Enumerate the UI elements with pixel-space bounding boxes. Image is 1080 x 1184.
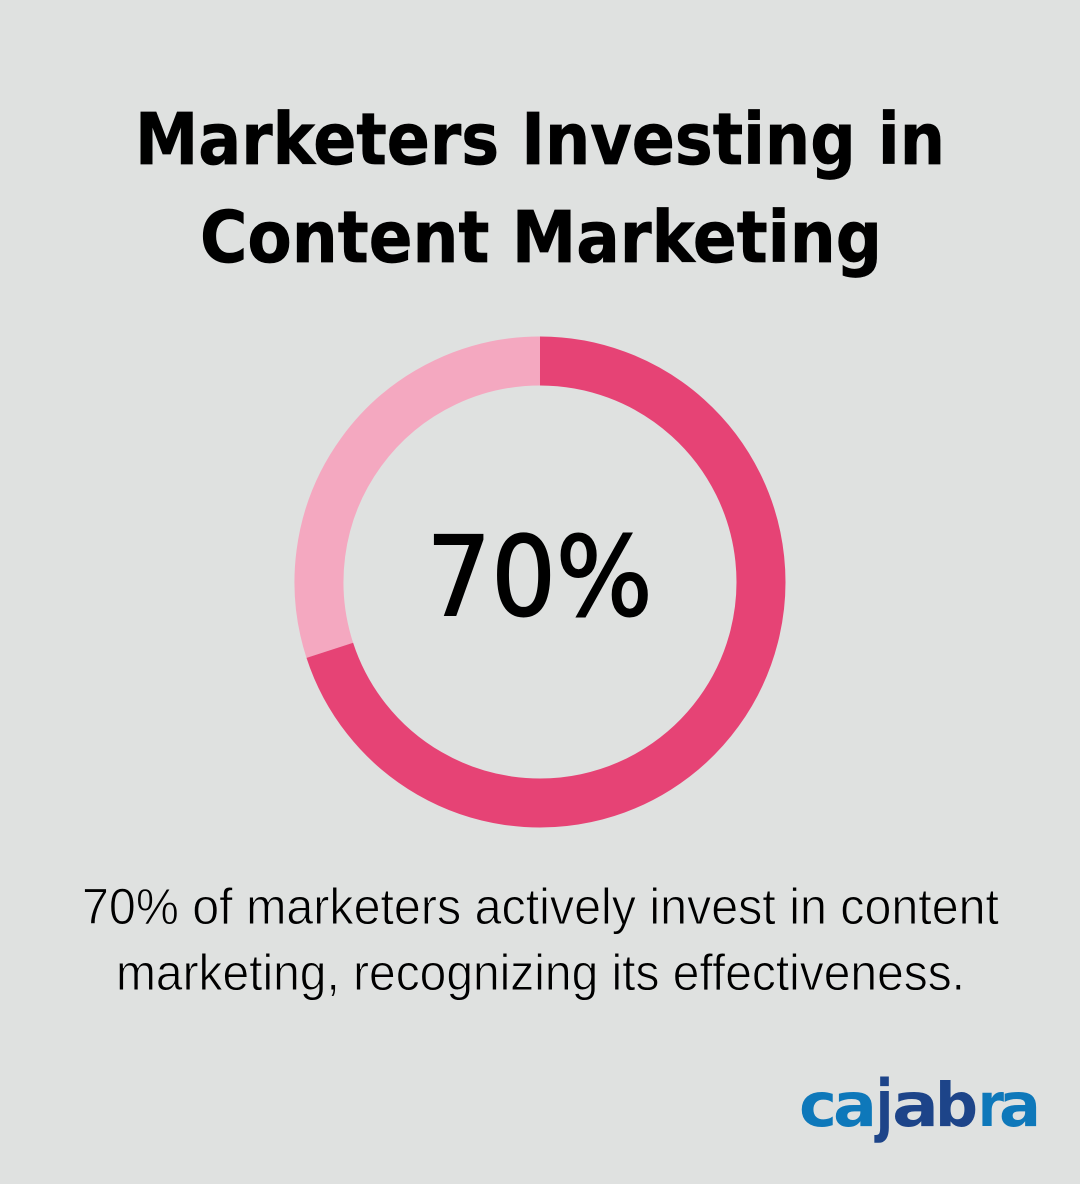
title — [135, 98, 945, 279]
title: Marketers Investing in — [135, 98, 945, 181]
description text — [82, 878, 999, 1001]
logo: cajabra: c — [799, 1070, 837, 1141]
logo: cajabra: a — [892, 1070, 939, 1141]
logo: cajabra: a — [833, 1070, 877, 1141]
logo: cajabra: j — [874, 1066, 893, 1145]
title: Content Marketing — [200, 196, 882, 279]
description text: 70% of marketers actively invest in content — [82, 878, 999, 935]
donut value: 70% — [426, 513, 652, 641]
logo: cajabra — [799, 1066, 1041, 1145]
description text: marketing, recognizing its effectiveness. — [116, 944, 965, 1001]
donut chart: 70 percent — [319, 361, 761, 803]
donut segment: 70 percent — [330, 361, 761, 803]
logo: cajabra: a — [999, 1070, 1041, 1141]
logo: cajabra: b — [935, 1070, 978, 1141]
logo: cajabra: r — [978, 1070, 1004, 1141]
donut segment: remaining 30 percent — [319, 361, 540, 650]
